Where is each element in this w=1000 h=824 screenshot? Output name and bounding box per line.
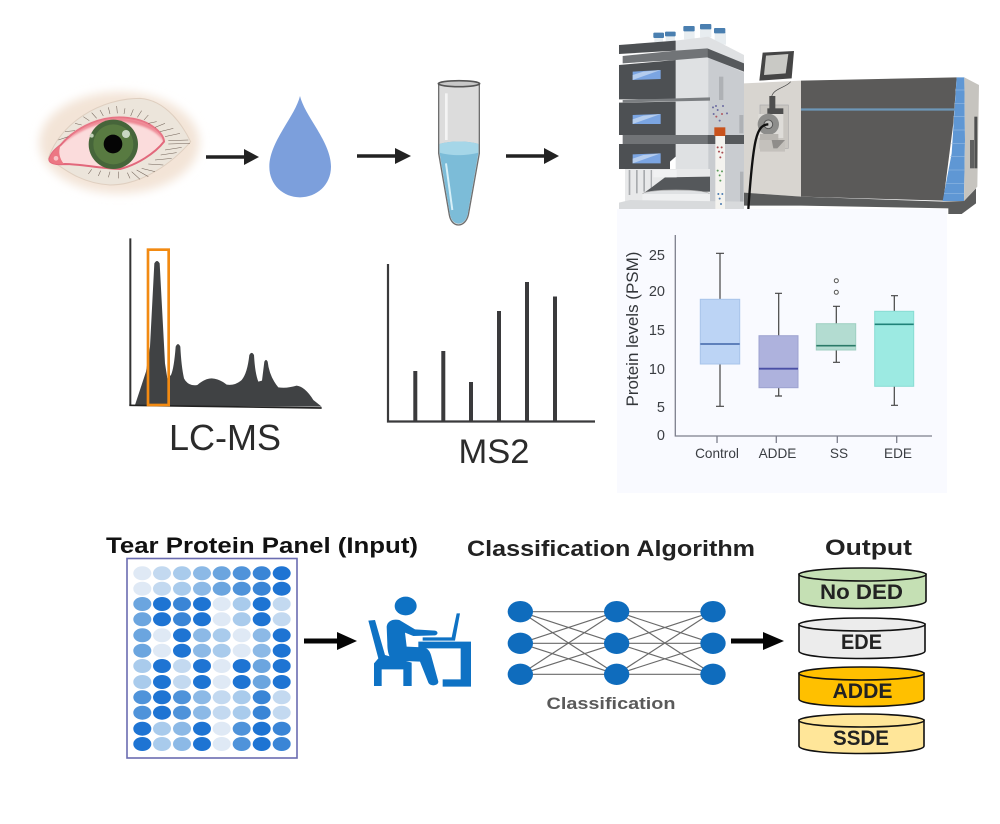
output: No DED cylinder: No DED	[820, 581, 903, 604]
heading: classification algorithm: Classification Algorithm	[467, 536, 755, 561]
icon: red eye	[39, 92, 199, 193]
heading: output: Output	[825, 535, 913, 560]
output: No DED cylinder	[799, 568, 926, 608]
arrow: tube to instrument	[506, 148, 559, 164]
box: EDE	[875, 296, 914, 405]
chart: protein heat map	[127, 558, 297, 758]
x tick labels: Control	[695, 446, 739, 461]
output: SSDE cylinder	[799, 714, 924, 754]
icon: sample tube	[438, 81, 480, 225]
arrow: eye to tear drop	[206, 149, 259, 165]
output: SSDE cylinder: SSDE	[833, 727, 889, 750]
y tick labels: 0	[657, 428, 665, 444]
y tick labels	[649, 248, 665, 444]
label: MS2: MS2	[459, 433, 529, 471]
label: LC-MS: LC-MS	[169, 417, 281, 458]
liquid chromatography stack	[619, 24, 744, 210]
label: classification: Classification	[546, 694, 676, 713]
y tick labels: 5	[657, 400, 665, 416]
arrow: network to output	[731, 632, 784, 650]
x tick labels: EDE	[884, 446, 912, 461]
y tick labels: 20	[649, 284, 665, 300]
axes	[675, 235, 932, 443]
chart: LC-MS chromatogram	[129, 238, 322, 408]
output: ADDE cylinder: ADDE	[832, 680, 892, 703]
x tick labels	[695, 446, 912, 461]
heading: tear protein panel: Tear Protein Panel (Input)	[106, 533, 418, 558]
y tick labels: 15	[649, 323, 665, 339]
chart: MS2 spectrum	[388, 264, 595, 422]
output: EDE cylinder: EDE	[841, 631, 882, 654]
y tick labels: 10	[649, 362, 665, 378]
output: ADDE cylinder	[799, 667, 924, 706]
icon: LC-MS instrument	[619, 24, 979, 214]
y tick labels: 25	[649, 248, 665, 264]
x tick labels: SS	[830, 446, 848, 461]
arrow: drop to tube	[357, 148, 411, 164]
x tick labels: ADDE	[759, 446, 796, 461]
box: SS	[816, 279, 856, 362]
box: ADDE	[759, 293, 798, 396]
icon: tear drop	[269, 96, 331, 197]
panel: box plot	[617, 209, 947, 493]
box: Control	[700, 253, 740, 406]
diagram: neural network	[508, 601, 726, 685]
y axis title: Protein levels (PSM)	[623, 252, 642, 406]
mass spectrometer	[744, 51, 979, 214]
icon: person at laptop	[368, 597, 471, 687]
output: EDE cylinder	[799, 618, 925, 658]
arrow: panel to analyst	[304, 632, 357, 650]
